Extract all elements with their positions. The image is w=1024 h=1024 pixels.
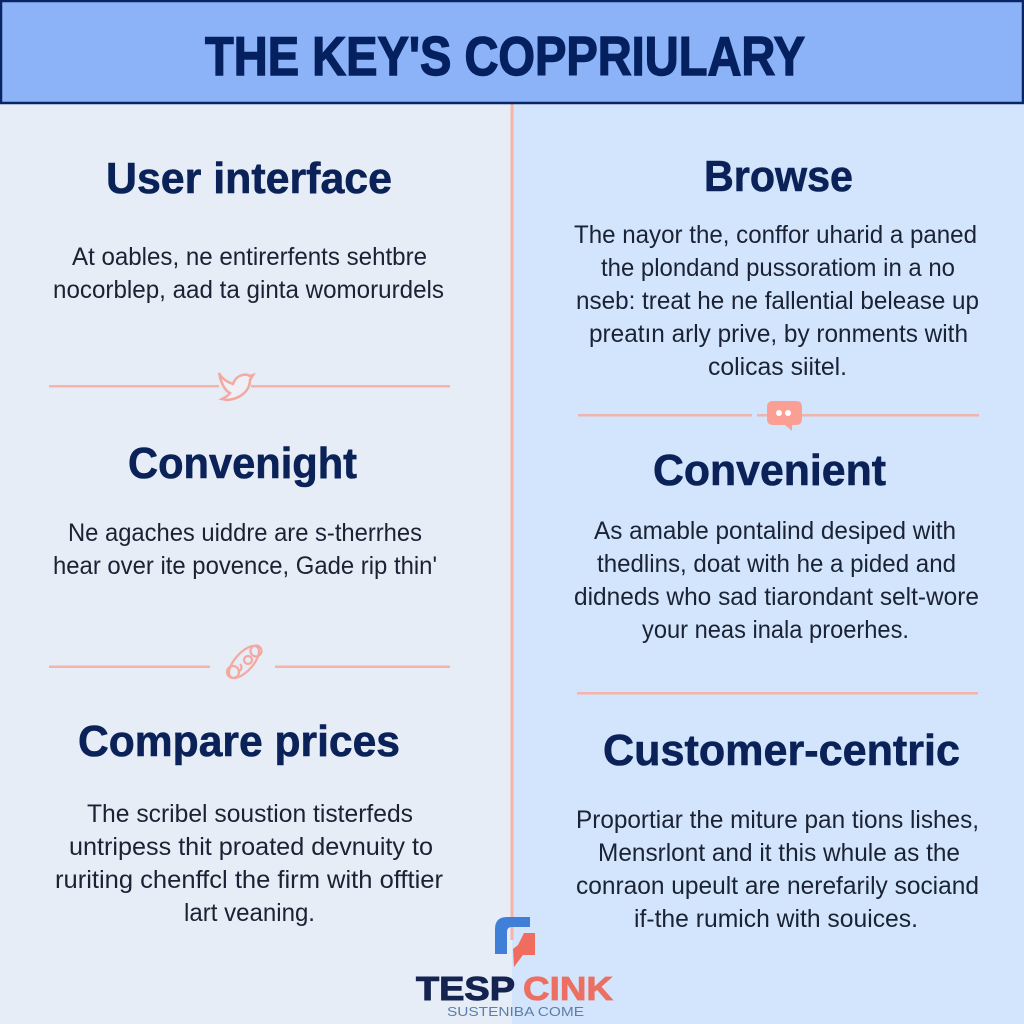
section: Convenient: Convenient xyxy=(653,446,886,495)
section: User interface: nocorblep, aad ta ginta womorurdels xyxy=(53,276,444,304)
section: Customer-centric xyxy=(576,726,979,933)
divider with bird icon xyxy=(49,373,450,400)
panel: left column xyxy=(49,154,450,927)
section: Convenight: hear over ite povence, Gade rip thin' xyxy=(53,552,437,580)
section: Convenient xyxy=(574,446,979,644)
section: Browse xyxy=(574,152,979,381)
logo xyxy=(416,917,613,1019)
title banner xyxy=(1,1,1023,103)
title: THE KEY'S COPPRIULARY xyxy=(205,25,805,87)
section: Browse: The nayor the, conffor uharid a paned xyxy=(574,221,977,249)
section: Browse: preatın arly prive, by ronments with xyxy=(589,320,968,348)
section: Customer-centric: if-the rumich with souices. xyxy=(634,905,918,933)
logo tagline: SUSTENIBA COME xyxy=(447,1004,584,1019)
section: Customer-centric: Customer-centric xyxy=(603,726,960,775)
section: Convenient: didneds who sad tiarondant selt-wore xyxy=(574,583,979,611)
section: Convenight: Convenight xyxy=(128,439,357,488)
section: Convenient: thedlins, doat with he a pided and xyxy=(597,550,956,578)
section: Compare prices xyxy=(55,717,443,927)
section: User interface xyxy=(53,154,444,304)
section: Compare prices: The scribel soustion tisterfeds xyxy=(87,800,413,828)
section: User interface: At oables, ne entirerfents sehtbre xyxy=(72,243,427,271)
logo wordmark: TESP xyxy=(416,970,515,1007)
section: Convenight xyxy=(53,439,437,580)
divider with chat icon xyxy=(578,401,979,431)
section: User interface: User interface xyxy=(106,154,392,203)
section: Customer-centric: Proportiar the miture pan tions lishes, xyxy=(576,806,979,834)
section: Browse: nseb: treat he ne fallential belease up xyxy=(576,287,979,315)
section: Compare prices: Compare prices xyxy=(78,717,400,766)
section: Browse: Browse xyxy=(704,152,853,201)
logo: CINK xyxy=(523,970,613,1007)
section: Convenight: Ne agaches uiddre are s-therrhes xyxy=(68,519,422,547)
panel: right column xyxy=(574,152,979,933)
section: Compare prices: ruriting chenffcl the firm with offtier xyxy=(55,866,443,894)
divider with knot icon xyxy=(49,641,450,683)
section: Compare prices: lart veaning. xyxy=(184,899,315,927)
section: Compare prices: untripess thit proated devnuity to xyxy=(69,833,433,861)
section: Browse: the plondand pussoratiom in a no xyxy=(601,254,955,282)
section: Customer-centric: conraon upeult are nerefarily sociand xyxy=(576,872,979,900)
section: Convenient: your neas inala proerhes. xyxy=(642,616,909,644)
section: Customer-centric: Mensrlont and it this whule as the xyxy=(598,839,960,867)
section: Convenient: As amable pontalind desiped with xyxy=(594,517,956,545)
icon: logo mark xyxy=(495,917,535,967)
section: Browse: colicas siitel. xyxy=(708,353,847,381)
